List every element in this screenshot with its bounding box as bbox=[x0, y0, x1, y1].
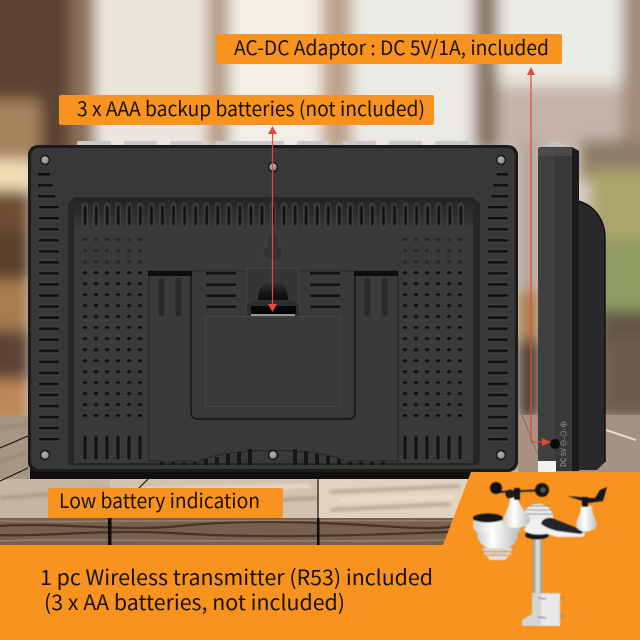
label: backup batteries: 3 x AAA backup batteries (not included) bbox=[77, 93, 425, 122]
label: adaptor: AC-DC Adaptor : DC 5V/1A, included bbox=[234, 32, 549, 61]
housing bbox=[28, 145, 518, 472]
orange footer band bbox=[0, 472, 640, 640]
left tilt clip bbox=[148, 271, 192, 317]
side body bbox=[538, 147, 579, 471]
stand recess outline bbox=[191, 272, 355, 419]
blurred room background bbox=[0, 0, 640, 425]
display side view bbox=[538, 143, 605, 472]
label: low battery: Low battery indication bbox=[59, 485, 260, 514]
side slots right bbox=[480, 172, 516, 446]
bottom arc vents bbox=[160, 449, 385, 465]
side slots left bbox=[30, 172, 68, 446]
dot grid right bbox=[400, 235, 466, 422]
keyhole hanger bbox=[263, 233, 283, 261]
center dome bbox=[523, 504, 553, 540]
arrow: adaptor to DC jack bbox=[527, 67, 551, 446]
display back view bbox=[28, 141, 518, 479]
shadow under display bbox=[30, 466, 478, 479]
wooden table bbox=[0, 415, 640, 546]
battery door bbox=[206, 316, 340, 406]
tilt stand bbox=[578, 201, 605, 470]
dot grid left bbox=[80, 235, 146, 422]
transmitter description bbox=[40, 562, 433, 617]
side button bbox=[548, 143, 563, 148]
raised rear panel bbox=[68, 197, 480, 465]
white connector bbox=[538, 461, 556, 472]
right tilt clip bbox=[354, 271, 398, 317]
bottom vent slots left bbox=[83, 435, 142, 460]
battery latch recess bbox=[247, 268, 299, 316]
mount pole bbox=[533, 535, 542, 595]
arrow: batteries double headed bbox=[268, 126, 277, 312]
transmitter description: (3 x AA batteries, not included) bbox=[44, 587, 345, 617]
transmitter description: 1 pc Wireless transmitter (R53) included bbox=[40, 562, 433, 592]
anemometer arm bbox=[490, 482, 549, 528]
wind vane bbox=[567, 487, 607, 532]
top buttons bbox=[77, 141, 469, 147]
top vent slots bbox=[80, 200, 466, 230]
DC jack bbox=[550, 439, 560, 449]
bottom vent slots right bbox=[403, 435, 462, 460]
pole clamp bbox=[522, 593, 564, 626]
fade on upper dots bbox=[79, 235, 466, 268]
rain gauge bbox=[473, 514, 520, 560]
DC 5V label: DC 5V ⊖-⊙-⊕ bbox=[559, 421, 569, 467]
solar panel bbox=[538, 518, 585, 537]
weather sensor illustration bbox=[473, 482, 607, 626]
screws bbox=[40, 156, 506, 460]
center slots right bbox=[310, 272, 340, 308]
center slots left bbox=[206, 272, 236, 308]
stand plate bbox=[149, 271, 398, 461]
